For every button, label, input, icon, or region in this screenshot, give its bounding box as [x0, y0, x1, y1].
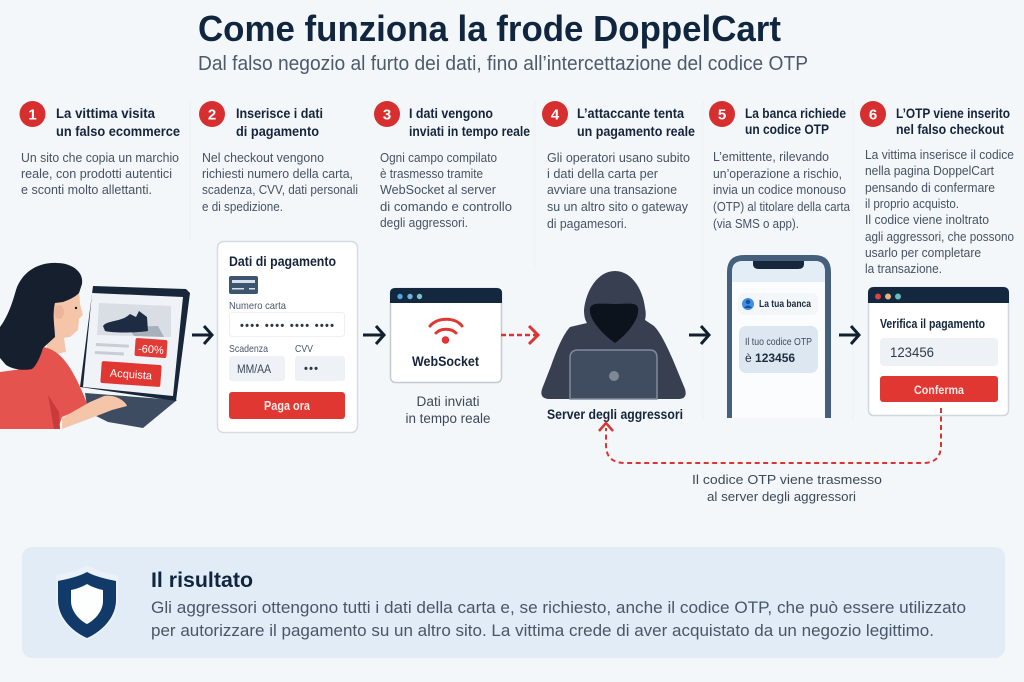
- step 2 text: [199, 101, 358, 214]
- subtitle: Dal falso negozio al furto dei dati, fino all’intercettazione del codice OTP: [198, 53, 808, 75]
- step 1 description: [21, 150, 179, 197]
- step 5 description: (via SMS o app).: [713, 216, 799, 231]
- confirm button: [880, 376, 998, 402]
- icon: credit card: [229, 276, 258, 294]
- websocket caption: in tempo reale: [406, 411, 490, 426]
- step 4 description: di pagamesori.: [547, 216, 627, 231]
- step 4 description: avviare una transazione: [547, 182, 677, 197]
- step 3 heading: I dati vengono: [409, 105, 493, 121]
- websocket window: [390, 288, 502, 382]
- payment form card: [218, 242, 358, 432]
- step 6 description: pensando di confermare: [865, 180, 995, 195]
- step 5 number badge: 5: [718, 106, 726, 124]
- step 5 number badge: [709, 101, 735, 127]
- step 4 heading: un pagamento reale: [577, 123, 695, 139]
- hoodie body: [541, 271, 686, 399]
- step 6 text: [860, 101, 1014, 276]
- cvv field: CVV: [295, 343, 313, 355]
- confirm button: Conferma: [914, 383, 964, 397]
- step 5 description: (OTP) al titolare della carta: [713, 199, 851, 214]
- pay button: [229, 392, 345, 419]
- cvv field: [295, 343, 345, 381]
- step 5 text: [709, 101, 851, 231]
- arrow 4: [839, 326, 859, 344]
- step 2 description: e di spedizione.: [202, 199, 283, 214]
- expiry field: Scadenza: [229, 343, 268, 355]
- step 4 text: [542, 101, 695, 231]
- step 6 number badge: 6: [869, 106, 877, 124]
- step 5 description: un’operazione a rischio,: [713, 166, 842, 181]
- step 2 number badge: [199, 101, 225, 127]
- woman: [0, 263, 127, 429]
- step 2 description: scadenza, CVV, dati personali: [202, 182, 358, 197]
- step 1 text: [20, 101, 180, 197]
- step 3 description: è trasmesso tramite: [380, 166, 483, 181]
- title: Come funziona la frode DoppelCart: [198, 8, 781, 49]
- step 2 number badge: 2: [208, 106, 216, 124]
- step 2 heading: di pagamento: [236, 123, 319, 139]
- step 6 description: usarlo per completare: [865, 245, 981, 260]
- websocket label: WebSocket: [412, 353, 479, 369]
- step 5 heading: La banca richiede: [745, 105, 846, 121]
- step 1 description: e sconti molto allettanti.: [21, 182, 152, 197]
- icon: shield: [56, 565, 118, 640]
- step 3 heading: inviati in tempo reale: [409, 123, 530, 139]
- step 1 heading: La vittima visita: [56, 105, 155, 121]
- return arrow caption: [692, 472, 882, 504]
- bank name row: La tua banca: [759, 299, 811, 310]
- arrow 1: [192, 326, 212, 344]
- expiry field: [229, 343, 285, 381]
- result description: per autorizzare il pagamento su un altro sito. La vittima crede di aver acquistato da un negozio legittimo.: [151, 621, 934, 640]
- phone with OTP: [727, 255, 831, 418]
- buy button: Acquista: [109, 368, 153, 383]
- card number field: •••• •••• •••• ••••: [240, 320, 334, 332]
- red dashed return arrow: [599, 408, 941, 463]
- step 3 description: Ogni campo compilato: [380, 150, 497, 165]
- step 1 description: reale, con prodotti autentici: [21, 166, 172, 181]
- shop product photo: [97, 303, 171, 337]
- discount badge: -60%: [138, 343, 164, 357]
- laptop: [80, 286, 190, 428]
- step 3 text: [374, 101, 530, 230]
- OTP message bubble: è 123456: [745, 351, 795, 365]
- step 4 description: Gli operatori usano subito: [547, 150, 690, 165]
- step 2 description: richiesti numero della carta,: [202, 166, 353, 181]
- step 5 description: [713, 149, 851, 231]
- form heading: Dati di pagamento: [229, 254, 336, 269]
- product text lines: [95, 343, 129, 356]
- step 4 heading: L’attaccante tenta: [577, 105, 684, 121]
- step 3 number badge: 3: [383, 106, 391, 124]
- step 4 description: su un altro sito o gateway: [547, 199, 688, 214]
- OTP input: [880, 338, 998, 366]
- fake checkout window: [868, 287, 1009, 416]
- step 4 number badge: [542, 101, 568, 127]
- result description: [151, 598, 966, 640]
- step 2 heading: [236, 105, 323, 139]
- step 5 heading: [745, 105, 846, 137]
- step 6 description: il proprio acquisto.: [865, 196, 959, 211]
- step 2 description: [202, 150, 358, 214]
- return arrow caption: Il codice OTP viene trasmesso: [692, 472, 882, 487]
- step 1 heading: un falso ecommerce: [56, 123, 180, 139]
- step 6 description: Il codice viene inoltrato: [865, 212, 989, 227]
- hooded attacker illustration: [541, 271, 686, 399]
- red dashed arrow: [501, 326, 538, 344]
- step 6 description: la transazione.: [865, 261, 942, 276]
- step 3 description: degli aggressori.: [380, 215, 468, 230]
- discount badge: [134, 338, 168, 358]
- pay button: Paga ora: [264, 399, 311, 413]
- OTP message bubble: [739, 326, 818, 373]
- expiry field: MM/AA: [237, 364, 271, 376]
- step 1 description: Un sito che copia un marchio: [21, 150, 179, 165]
- step 6 heading: nel falso checkout: [896, 121, 1004, 137]
- hood face shadow: [590, 304, 638, 343]
- step 3 description: di comando e controllo: [380, 199, 512, 214]
- step 4 description: [547, 150, 690, 231]
- step 1 number badge: [20, 101, 46, 127]
- arrow 2: [363, 326, 384, 344]
- cvv field: •••: [304, 363, 318, 375]
- result panel: [22, 547, 1005, 658]
- checkout title bar: [868, 287, 1009, 303]
- websocket caption: Dati inviati: [416, 394, 480, 409]
- websocket caption: [406, 394, 490, 426]
- step 5 heading: un codice OTP: [745, 121, 829, 137]
- step 6 description: nella pagina DoppelCart: [865, 163, 994, 178]
- result heading: Il risultato: [151, 569, 253, 592]
- laptop: [570, 350, 657, 399]
- step 1 heading: [56, 105, 180, 139]
- verify heading: Verifica il pagamento: [880, 317, 985, 331]
- step 5 description: invia un codice monouso: [713, 182, 846, 197]
- step 4 heading: [577, 105, 695, 139]
- step 2 description: Nel checkout vengono: [202, 150, 324, 165]
- card number field: [229, 300, 344, 336]
- step 2 heading: Inserisce i dati: [236, 105, 323, 121]
- step 6 description: [865, 147, 1014, 276]
- return arrow caption: al server degli aggressori: [707, 489, 856, 504]
- buy button: [100, 361, 162, 387]
- step 6 heading: [896, 105, 1010, 137]
- step 6 description: La vittima inserisce il codice: [865, 147, 1014, 162]
- step 3 heading: [409, 105, 530, 139]
- OTP input: 123456: [890, 345, 934, 360]
- step 3 description: WebSocket al server: [380, 182, 497, 197]
- card number field: Numero carta: [229, 300, 286, 312]
- attacker server label: Server degli aggressori: [547, 407, 683, 422]
- step 3 description: [380, 150, 512, 230]
- illustration: woman at laptop on fake shop: [0, 263, 190, 429]
- OTP message bubble: Il tuo codice OTP: [745, 337, 812, 348]
- step 4 description: i dati della carta per: [547, 166, 659, 181]
- bank name row: [738, 293, 818, 315]
- icon: wifi signal: [430, 319, 462, 344]
- step 3 number badge: [374, 101, 400, 127]
- window title bar: [390, 288, 502, 303]
- arrow 3: [689, 326, 709, 344]
- result description: Gli aggressori ottengono tutti i dati della carta e, se richiesto, anche il codice OTP, che può essere utilizzato: [151, 598, 966, 617]
- step 5 description: L’emittente, rilevando: [713, 149, 829, 164]
- step 1 number badge: 1: [28, 106, 37, 124]
- step 4 number badge: 4: [551, 106, 560, 124]
- step 6 number badge: [860, 101, 886, 127]
